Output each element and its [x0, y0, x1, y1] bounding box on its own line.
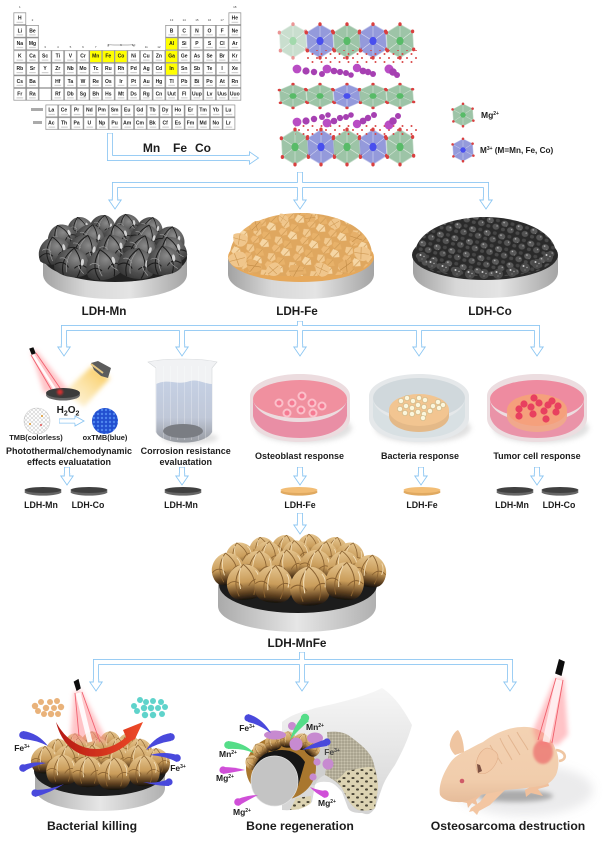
periodic table: Na [17, 41, 23, 47]
periodic table: Ge [181, 54, 188, 60]
mouse body [440, 727, 558, 802]
legend: M3+: (M=Mn, Fe, Co) [493, 146, 554, 155]
periodic table: Se [206, 54, 213, 60]
periodic table: Pu [111, 120, 118, 126]
periodic table: Gd [136, 108, 143, 114]
disk: LDH-Mn [36, 212, 189, 299]
periodic table: Tc [93, 66, 99, 72]
socket wall [296, 745, 329, 786]
periodic table: Kr [232, 54, 238, 60]
label: LDH-Mn: LDH-Mn [82, 305, 126, 318]
periodic table: 10 [132, 43, 136, 47]
arrow to LDH-MnFe [294, 513, 306, 534]
periodic table: Ca [29, 54, 36, 60]
mini disks and labels: LDH-Mn [164, 500, 198, 510]
legend: M3+: M [480, 146, 487, 155]
periodic table: N [195, 28, 199, 34]
disk: LDH-MnFe [209, 533, 389, 632]
periodic table: Am [123, 120, 132, 126]
periodic table: Fm [187, 120, 195, 126]
periodic table: Li [18, 28, 23, 34]
periodic table: Db [67, 92, 74, 98]
periodic table: U [87, 120, 91, 126]
illustration: bacterial killing [14, 680, 186, 811]
periodic table: At [219, 79, 225, 85]
illustration: bacteria dish [369, 374, 471, 443]
periodic table: O [208, 28, 212, 34]
periodic table: Re [92, 79, 99, 85]
label: osteoblast response: Osteoblast response [255, 451, 344, 461]
periodic table: 2 [32, 18, 34, 22]
trabecular piece under implant [290, 796, 311, 810]
periodic table: Bi [194, 79, 200, 85]
periodic table: In [169, 66, 174, 72]
eye [460, 779, 464, 783]
periodic table: Cs [17, 79, 23, 85]
illustration: bone regeneration: Mg [216, 773, 228, 783]
legend: M3+: 3+ [487, 146, 493, 152]
periodic table: Cl [220, 41, 225, 47]
periodic table: Ra [29, 92, 36, 98]
arrow: periodic table to layered structure [110, 133, 258, 164]
periodic table: H [18, 16, 22, 22]
periodic table: Rh [118, 66, 124, 72]
periodic table: Lv [207, 92, 213, 98]
periodic table: Pa [74, 120, 80, 126]
label: corrosion resistance: Corrosion resistance [141, 446, 231, 456]
periodic table: Es [175, 120, 181, 126]
periodic table: Mg [29, 41, 36, 47]
periodic table: Uut [167, 92, 176, 98]
periodic table: Ds [130, 92, 137, 98]
periodic table: Os [105, 79, 112, 85]
periodic table: Sg [80, 92, 86, 98]
periodic table: Sb [194, 66, 200, 72]
bacteria: live [32, 698, 64, 717]
periodic table: Uus [217, 92, 227, 98]
mini disks and labels: LDH-Fe [284, 500, 316, 510]
periodic table: Co [118, 54, 124, 60]
periodic table: Tb [149, 108, 156, 114]
periodic table: No [212, 120, 219, 126]
periodic table: Au [143, 79, 150, 85]
periodic table: Lu [225, 108, 231, 114]
illustration: laser and lamp on disk [30, 348, 111, 407]
periodic table: 5 [70, 45, 72, 49]
periodic table [14, 5, 241, 130]
red reaction arrow [56, 722, 143, 757]
periodic table: Ag [143, 66, 150, 72]
illustration: bone regeneration: Mg [233, 807, 245, 817]
illustration: bone regeneration: 2+ [231, 750, 237, 756]
coarse trabecular bone [336, 767, 378, 811]
periodic table: 13 [170, 18, 174, 22]
mini disks and labels: LDH-Mn [495, 500, 529, 510]
periodic table: I [221, 66, 223, 72]
periodic table: Ga [168, 54, 175, 60]
periodic table: Np [99, 120, 105, 126]
illustration: bone regeneration: Fe [239, 723, 249, 733]
periodic table: Ni [131, 54, 137, 60]
bone outer shape [282, 688, 412, 814]
fine cancellous bone [325, 732, 378, 811]
periodic table: Fe [105, 54, 111, 60]
back ear [450, 730, 464, 755]
periodic table: Sr [30, 66, 35, 72]
laser spot on skin [533, 740, 553, 764]
periodic table: Pr [74, 108, 79, 114]
label: H2O2: O [68, 405, 76, 416]
iron ion comets [19, 731, 181, 797]
periodic table: 12 [157, 45, 161, 49]
label: LDH-Co: LDH-Co [468, 305, 512, 318]
heading: Mn Fe Co [143, 141, 211, 155]
illustration: bacterial killing: 3+ [180, 764, 186, 770]
label: oxTMB(blue): oxTMB(blue) [83, 433, 128, 442]
periodic table: Sm [111, 108, 119, 114]
periodic table: Th [61, 120, 67, 126]
periodic table: Al [169, 41, 175, 47]
illustration: bone regeneration: 2+ [228, 774, 234, 780]
periodic table: Dy [162, 108, 169, 114]
front ear [476, 748, 498, 774]
illustration: beaker [148, 359, 218, 444]
label: corrosion resistance: evaluatation [159, 457, 212, 467]
periodic table: 1 [19, 5, 21, 9]
illustration: tumor cell dish [487, 374, 589, 443]
periodic table: V [69, 54, 73, 60]
label: bone regeneration: Bone regeneration [246, 819, 354, 833]
label: osteosarcoma destruction: Osteosarcoma destruction [431, 819, 585, 833]
label: tumor cell response: Tumor cell response [493, 451, 581, 461]
periodic table: Uuo [230, 92, 240, 98]
periodic table: 9 [120, 43, 122, 47]
legend: Mg2+ [451, 103, 499, 127]
periodic table: Rb [16, 66, 23, 72]
icon: oxTMB blue [92, 408, 118, 434]
periodic table: La [48, 108, 54, 114]
periodic table: Eu [124, 108, 130, 114]
periodic table: Zn [156, 54, 162, 60]
illustration: osteoblast dish [250, 374, 352, 443]
periodic table: Nd [86, 108, 93, 114]
label: bacterial killing: Bacterial killing [47, 819, 137, 833]
periodic table: Ne [232, 28, 238, 34]
legend: Mg2+: 2+ [493, 111, 499, 117]
periodic table: Rg [143, 92, 150, 98]
periodic table: Hs [105, 92, 112, 98]
illustration: bone regeneration: Mn [219, 749, 231, 759]
periodic table: 3 [44, 45, 46, 49]
periodic table: Pm [98, 108, 106, 114]
periodic table: Hf [55, 79, 61, 85]
periodic table: Cm [136, 120, 144, 126]
periodic table: Te [207, 66, 212, 72]
periodic table: Nb [67, 66, 74, 72]
heading: Mn Fe Co: Co [195, 141, 211, 155]
periodic table: W [81, 79, 86, 85]
implant with flower coating [243, 731, 324, 806]
illustration: bone regeneration: Mg [318, 798, 330, 808]
periodic table: Cf [163, 120, 168, 126]
periodic table: Cr [80, 54, 86, 60]
illustration: bone regeneration: Fe [324, 747, 334, 757]
arrow tree: structure to three LDH disks [109, 172, 492, 209]
tail [556, 750, 565, 761]
periodic table: Bk [149, 120, 156, 126]
periodic table: P [195, 41, 199, 47]
periodic table: Ce [61, 108, 67, 114]
illustration: bone regeneration: 3+ [249, 724, 255, 730]
far front foot [462, 790, 484, 808]
bacteria: killed [131, 697, 168, 718]
illustration: bone regeneration: 2+ [245, 808, 251, 814]
periodic table: Cn [156, 92, 162, 98]
periodic table: 17 [220, 18, 224, 22]
periodic table: Pb [181, 79, 187, 85]
periodic table: Tl [169, 79, 174, 85]
periodic table: Po [206, 79, 213, 85]
arrow tree: to five evaluations [58, 321, 543, 356]
illustration: bone regeneration [216, 688, 412, 817]
periodic table: Fr [17, 92, 22, 98]
label: TMB(colorless): TMB(colorless) [9, 433, 63, 442]
illustration: bone regeneration: 2+ [318, 723, 324, 729]
mini disks and labels: LDH-Mn [24, 500, 58, 510]
label: bacteria response: Bacteria response [381, 451, 459, 461]
periodic table: 18 [233, 5, 237, 9]
legend: M3+ [451, 138, 554, 162]
icon: TMB colorless [24, 408, 50, 434]
periodic table: Hg [156, 79, 162, 85]
disk: LDH-Fe [227, 212, 374, 299]
label: LDH-Fe: LDH-Fe [276, 305, 318, 318]
periodic table: Ho [174, 108, 181, 114]
illustration: bone regeneration: 3+ [334, 748, 340, 754]
periodic table: Br [219, 54, 225, 60]
mini disks and labels: LDH-Co [543, 500, 576, 510]
label: H2O2: 2 [64, 410, 68, 418]
heading: Mn Fe Co: Mn [143, 141, 160, 155]
periodic table: Pt [131, 79, 136, 85]
label: H2O2: 2 [76, 410, 80, 418]
mini disks and labels: LDH-Fe [406, 500, 438, 510]
layered double hydroxide crystal structure [278, 22, 417, 166]
periodic table: Ti [56, 54, 61, 60]
periodic table: Be [29, 28, 36, 34]
arrow tree: to three applications [90, 652, 516, 691]
periodic table: Fl [182, 92, 187, 98]
illustration: bone regeneration: Mn [306, 722, 318, 732]
laser beam [70, 680, 108, 742]
periodic table: Tm [199, 108, 207, 114]
periodic table: Si [182, 41, 187, 47]
periodic table: 14 [183, 18, 186, 22]
mini disks and labels [24, 487, 578, 510]
periodic table: He [232, 16, 238, 22]
periodic table: 4 [57, 45, 59, 49]
illustration: bacterial killing: Fe [170, 763, 180, 773]
periodic table: Ar [232, 41, 238, 47]
periodic table: S [208, 41, 212, 47]
periodic table: K [18, 54, 22, 60]
deposited mineral clusters [264, 722, 334, 781]
illustration: mouse with laser [440, 660, 593, 816]
periodic table: Mn [92, 54, 99, 60]
periodic table: Rn [231, 79, 238, 85]
text: photothermal evaluation: Photothermal/chemodynamic [6, 446, 132, 456]
periodic table: Sc [42, 54, 48, 60]
label: LDH-MnFe: LDH-MnFe [268, 636, 327, 650]
periodic table: 7 [95, 45, 97, 49]
heading: Mn Fe Co: Fe [173, 141, 187, 155]
periodic table: Bh [92, 92, 99, 98]
periodic table: Rf [55, 92, 61, 98]
near front leg and foot [469, 786, 505, 815]
disk: LDH-Co [412, 217, 558, 298]
text: photothermal evaluation: effects evaluatation [27, 457, 111, 467]
hind foot [525, 778, 549, 797]
periodic table: 6 [82, 45, 84, 49]
periodic table: 16 [208, 18, 211, 22]
periodic table: Y [43, 66, 47, 72]
illustration: bacterial killing: 3+ [24, 744, 30, 750]
periodic table: Md [199, 120, 207, 126]
arrow: TMB to oxTMB [59, 416, 84, 426]
periodic table: Pd [130, 66, 137, 72]
periodic table: Cu [143, 54, 150, 60]
periodic table: Zr [55, 66, 60, 72]
periodic table: Cd [156, 66, 162, 72]
periodic table: Mt [118, 92, 124, 98]
periodic table: Ac [48, 120, 55, 126]
periodic table: Sn [181, 66, 187, 72]
periodic table: As [194, 54, 200, 60]
periodic table: Yb [213, 108, 219, 114]
legend: Mg2+: Mg [481, 110, 493, 120]
periodic table: Xe [232, 66, 238, 72]
illustration: bone regeneration: 2+ [330, 799, 336, 805]
periodic table: Ta [68, 79, 73, 85]
periodic table: Ru [105, 66, 112, 72]
periodic table: 11 [145, 45, 148, 49]
periodic table: Lr [226, 120, 231, 126]
periodic table: B [170, 28, 174, 34]
periodic table: F [221, 28, 224, 34]
periodic table: Ba [29, 79, 36, 85]
periodic table: Er [188, 108, 193, 114]
laser beam [533, 678, 568, 745]
illustration: bacterial killing: Fe [14, 743, 24, 753]
mini disks and labels: LDH-Co [72, 500, 105, 510]
small arrows to mini disks [61, 467, 543, 485]
periodic table: 15 [195, 18, 199, 22]
ion comets [219, 714, 331, 806]
periodic table: Uup [192, 92, 202, 98]
periodic table: 8 [107, 43, 109, 47]
label: H2O2: H [57, 405, 64, 416]
periodic table: C [182, 28, 186, 34]
periodic table: Ir [119, 79, 123, 85]
periodic table: Mo [79, 66, 87, 72]
